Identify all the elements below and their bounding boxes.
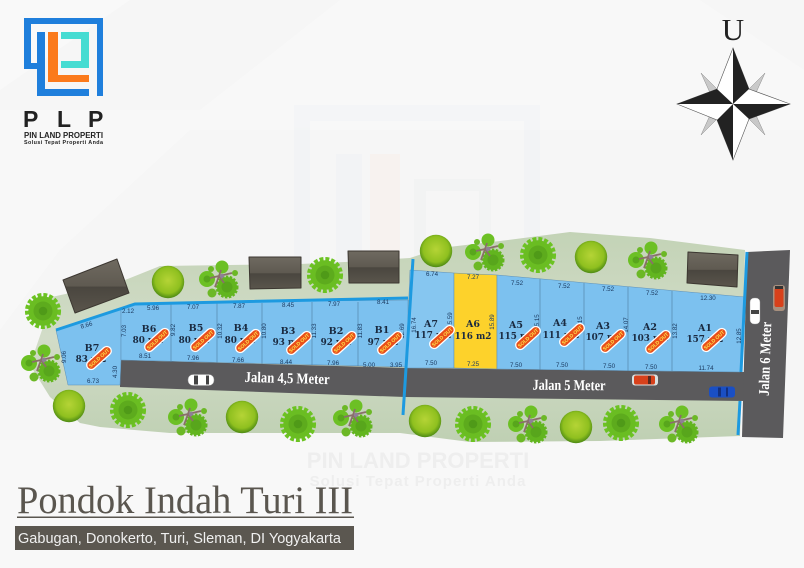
plot labels: 116 m2 xyxy=(455,332,491,342)
address bar: Gabugan, Donokerto, Turi, Sleman, DI Yogyakarta xyxy=(18,531,342,547)
dimensions: 7.50 xyxy=(603,363,616,370)
green landscape strip xyxy=(30,232,745,442)
plot labels: A3 xyxy=(595,321,610,332)
road labels: Jalan 5 Meter xyxy=(532,378,606,394)
road labels: Jalan 4,5 Meter xyxy=(244,370,330,388)
sold out stamps: SOLD OUT xyxy=(431,327,454,348)
sold out stamps: SOLD OUT xyxy=(602,331,625,352)
sold out stamps: SOLD OUT xyxy=(379,333,402,354)
plot labels xyxy=(76,318,723,365)
cars xyxy=(188,285,785,398)
dimensions: 11.83 xyxy=(357,323,364,339)
dimensions: 14.15 xyxy=(577,316,584,332)
dimensions: 16.74 xyxy=(411,317,418,333)
sold out stamps: SOLD OUT xyxy=(88,348,111,369)
house 1 xyxy=(63,259,129,313)
title: Pondok Indah Turi III xyxy=(17,479,353,522)
dimensions: 10.32 xyxy=(217,323,224,339)
plot labels: 103 m2 xyxy=(632,334,668,344)
dimensions: 9.82 xyxy=(170,323,177,336)
dimensions: 11.74 xyxy=(698,365,714,372)
plot labels: A7 xyxy=(423,319,438,330)
road labels xyxy=(244,321,775,396)
dimensions: 10.80 xyxy=(261,323,268,339)
sold out stamps: SOLD OUT xyxy=(517,328,540,349)
dimensions: 6.73 xyxy=(87,378,100,385)
houses xyxy=(63,251,738,313)
star outline xyxy=(677,48,790,160)
dimensions: 6.74 xyxy=(426,271,439,278)
plot labels: B3 xyxy=(281,326,295,337)
dimensions: 15.89 xyxy=(489,314,496,330)
dimensions: 12.30 xyxy=(700,295,716,302)
dimensions: 5.00 xyxy=(363,362,376,369)
dimensions: 8.45 xyxy=(282,302,295,309)
plot labels: 80 m2 xyxy=(225,336,255,346)
watermark text xyxy=(307,448,529,490)
logo mark xyxy=(24,18,103,96)
dimensions: 11.33 xyxy=(311,323,318,339)
logo letters: L xyxy=(57,106,71,132)
trees xyxy=(21,234,698,443)
road: Jalan 4,5 and 5 Meter xyxy=(120,360,745,401)
blue boundary lines xyxy=(56,252,747,435)
plot labels: A6 xyxy=(465,319,480,330)
sold out stamps: SOLD OUT xyxy=(237,331,260,352)
car: white vertical xyxy=(750,298,760,324)
dimensions: 7.52 xyxy=(646,290,659,297)
north label: U xyxy=(722,12,744,47)
car: blue xyxy=(709,386,735,398)
dimensions: 7.50 xyxy=(556,362,569,369)
plot labels: 115 m2 xyxy=(499,332,535,342)
dimensions: 8.51 xyxy=(139,353,152,360)
dimensions: 12.69 xyxy=(399,323,406,339)
plot labels: 117 m2 xyxy=(415,331,451,341)
dimensions: 7.96 xyxy=(327,360,340,367)
sold out stamps: SOLD OUT xyxy=(192,330,215,351)
house 4 xyxy=(687,252,738,287)
plot labels: 111 m2 xyxy=(543,331,579,341)
plots B6 to B1 xyxy=(121,300,408,367)
plot labels: A2 xyxy=(642,322,657,333)
plot dividers xyxy=(171,279,672,371)
logo letters: P xyxy=(88,106,103,132)
secondary points xyxy=(701,73,765,135)
plot labels: A5 xyxy=(508,320,523,331)
plot labels: 80 m2 xyxy=(133,336,163,346)
house 2 xyxy=(249,257,301,289)
logo xyxy=(23,18,104,146)
plot labels: A1 xyxy=(697,323,712,334)
dimensions: 7.52 xyxy=(511,280,524,287)
car: white xyxy=(188,374,214,386)
plot A7 xyxy=(406,270,454,368)
dimensions: 14.07 xyxy=(623,317,630,333)
watermark text: Solusi Tepat Properti Anda xyxy=(310,473,526,490)
dimensions: 4.30 xyxy=(112,365,119,378)
dimensions: 7.97 xyxy=(328,301,341,308)
logo tagline: Solusi Tepat Properti Anda xyxy=(24,140,104,146)
watermark logo xyxy=(302,113,532,354)
dimensions: 15.59 xyxy=(447,312,454,328)
dimensions: 7.07 xyxy=(187,304,200,311)
plot labels: B5 xyxy=(189,323,203,334)
logo letters: P xyxy=(23,106,38,132)
title underline xyxy=(17,516,354,518)
plot labels: A4 xyxy=(552,318,567,329)
sold out stamps: SOLD OUT xyxy=(703,330,726,351)
dimensions: 3.95 xyxy=(390,362,403,369)
car: red xyxy=(632,374,658,386)
star dark facets xyxy=(677,48,790,160)
plot labels: 97 m2 xyxy=(368,338,398,348)
dimensions: 8.66 xyxy=(80,320,94,331)
dimensions: 7.50 xyxy=(645,364,658,371)
dimensions: 8.41 xyxy=(377,299,390,306)
dimensions: 7.52 xyxy=(602,286,615,293)
dimensions: 7.87 xyxy=(233,303,246,310)
address bar xyxy=(15,526,354,550)
plot labels: B2 xyxy=(329,326,343,337)
dimensions: 7.50 xyxy=(510,362,523,369)
dimensions: 7.03 xyxy=(121,324,128,337)
plots A5 to A1 xyxy=(497,275,745,372)
plot labels: B7 xyxy=(85,343,99,354)
sold out stamps: SOLD OUT xyxy=(647,332,670,353)
compass xyxy=(677,12,790,160)
road labels: Jalan 6 Meter xyxy=(757,321,775,396)
plot labels: 80 m2 xyxy=(179,336,209,346)
watermark text: PIN LAND PROPERTI xyxy=(307,448,529,473)
plot labels: 107 m2 xyxy=(586,333,622,343)
dimensions: 7.27 xyxy=(467,274,480,281)
plot labels: B4 xyxy=(234,323,249,334)
plot labels: B1 xyxy=(375,325,389,336)
plot labels: B6 xyxy=(142,324,157,335)
plot labels: 83 m2 xyxy=(76,355,106,365)
dimensions: 13.82 xyxy=(672,323,679,339)
dimensions: 7.52 xyxy=(558,283,571,290)
road: Jalan 6 Meter xyxy=(742,250,790,438)
plot B7 xyxy=(56,309,121,385)
car: red vertical xyxy=(773,285,785,311)
road network xyxy=(120,250,790,438)
dimensions: 12.85 xyxy=(736,328,743,344)
dimensions: 7.25 xyxy=(467,361,480,368)
dimensions: 9.06 xyxy=(61,350,68,363)
dimensions: 8.44 xyxy=(280,359,293,366)
plot labels: 92 m2 xyxy=(321,338,351,348)
dimensions: 5.96 xyxy=(147,305,160,312)
dimensions: 2.12 xyxy=(122,308,135,315)
sold out stamps: SOLD OUT xyxy=(333,333,356,354)
dimensions: 15.15 xyxy=(534,314,541,330)
dimensions: 7.96 xyxy=(187,355,200,362)
dimensions: 7.66 xyxy=(232,357,245,364)
sold out stamps xyxy=(85,322,728,371)
plot labels: 93 m2 xyxy=(273,338,303,348)
plot labels: 157 m2 xyxy=(687,335,723,345)
plot A6 xyxy=(454,273,497,369)
sold out stamps: SOLD OUT xyxy=(146,330,169,351)
sold out stamps: SOLD OUT xyxy=(288,333,311,354)
dimensions: 7.50 xyxy=(425,360,438,367)
plots xyxy=(56,270,745,385)
house 3 xyxy=(348,251,399,283)
logo name: PIN LAND PROPERTI xyxy=(24,130,103,140)
dimensions xyxy=(61,271,743,385)
logo letters xyxy=(23,106,103,132)
sold out stamps: SOLD OUT xyxy=(561,325,584,346)
